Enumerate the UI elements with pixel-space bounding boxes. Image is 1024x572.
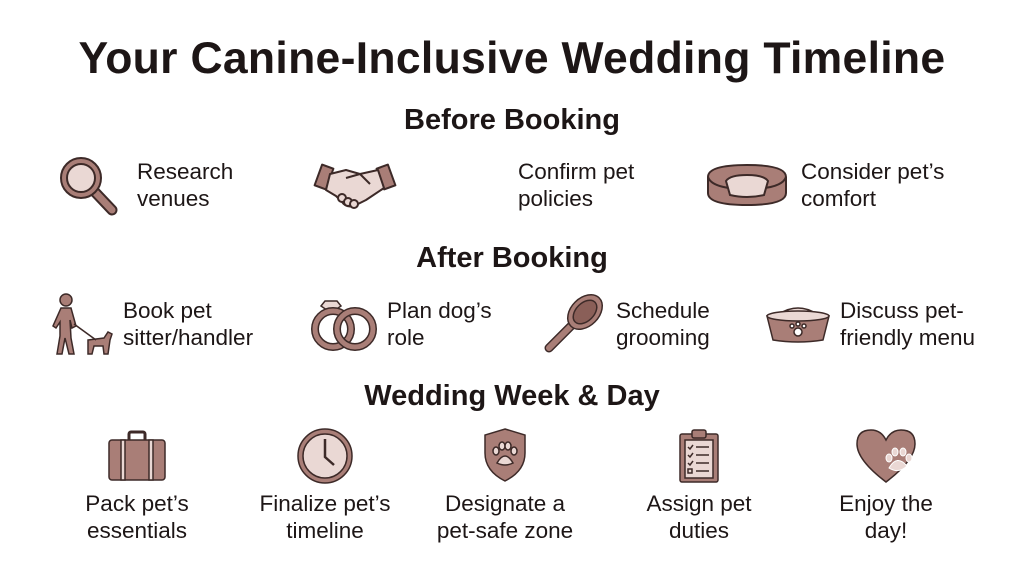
text: plan dogs role (387, 298, 492, 350)
text: discuss pet friendly menu: friendly menu (840, 325, 975, 350)
text: schedule grooming: grooming (616, 325, 710, 350)
text: research venues (137, 159, 233, 211)
text: book pet sitter: sitter/handler (123, 325, 253, 350)
text: designate pet safe zone: pet-safe zone (437, 518, 573, 543)
text: finalize pets timeline: Finalize pet’s (260, 491, 390, 516)
text: confirm pet policies: policies (518, 186, 593, 211)
text: designate pet safe zone (437, 491, 573, 543)
icon: pet bed (707, 164, 787, 206)
text: discuss pet friendly menu: Discuss pet- (840, 298, 964, 323)
icon: handshake (314, 164, 396, 209)
text: enjoy the day: Enjoy the (839, 491, 933, 516)
text: assign pet duties: Assign pet (646, 491, 752, 516)
text: research venues: venues (137, 186, 210, 211)
text: confirm pet policies (518, 159, 634, 211)
icon: suitcase (108, 430, 166, 481)
text: consider pets comfort (801, 159, 944, 211)
icon: person walking dog (52, 293, 113, 355)
text: consider pets comfort: comfort (801, 186, 876, 211)
text: plan dogs role: Plan dog’s (387, 298, 492, 323)
heading: after booking: After Booking (416, 242, 608, 274)
icon: rings (311, 300, 377, 351)
text: book pet sitter: Book pet (123, 298, 212, 323)
icon: brush (544, 294, 603, 352)
text: finalize pets timeline (260, 491, 390, 543)
text: pack pets essentials (85, 491, 189, 543)
icon: magnifier (60, 157, 118, 216)
text: research venues: Research (137, 159, 233, 184)
text: enjoy the day: day! (865, 518, 907, 543)
heading: wedding week and day: Wedding Week & Day (364, 380, 660, 412)
text: finalize pets timeline: timeline (286, 518, 364, 543)
title: Your Canine-Inclusive Wedding Timeline (79, 34, 945, 83)
text: pack pets essentials: essentials (87, 518, 187, 543)
text: plan dogs role: role (387, 325, 425, 350)
text: consider pets comfort: Consider pet’s (801, 159, 944, 184)
icon: clock (297, 428, 353, 484)
icon: shield with paw (484, 428, 526, 482)
icon: heart with paw (856, 429, 916, 483)
text: schedule grooming: Schedule (616, 298, 710, 323)
heading: before booking: Before Booking (404, 104, 620, 136)
text: assign pet duties (646, 491, 752, 543)
text: discuss pet friendly menu (840, 298, 975, 350)
text: enjoy the day (839, 491, 933, 543)
text: pack pets essentials: Pack pet’s (85, 491, 189, 516)
text: schedule grooming (616, 298, 710, 350)
icon: clipboard (679, 429, 719, 483)
text: assign pet duties: duties (669, 518, 729, 543)
text: designate pet safe zone: Designate a (445, 491, 565, 516)
icon: food bowl (766, 307, 830, 343)
text: book pet sitter (123, 298, 253, 350)
text: confirm pet policies: Confirm pet (518, 159, 634, 184)
